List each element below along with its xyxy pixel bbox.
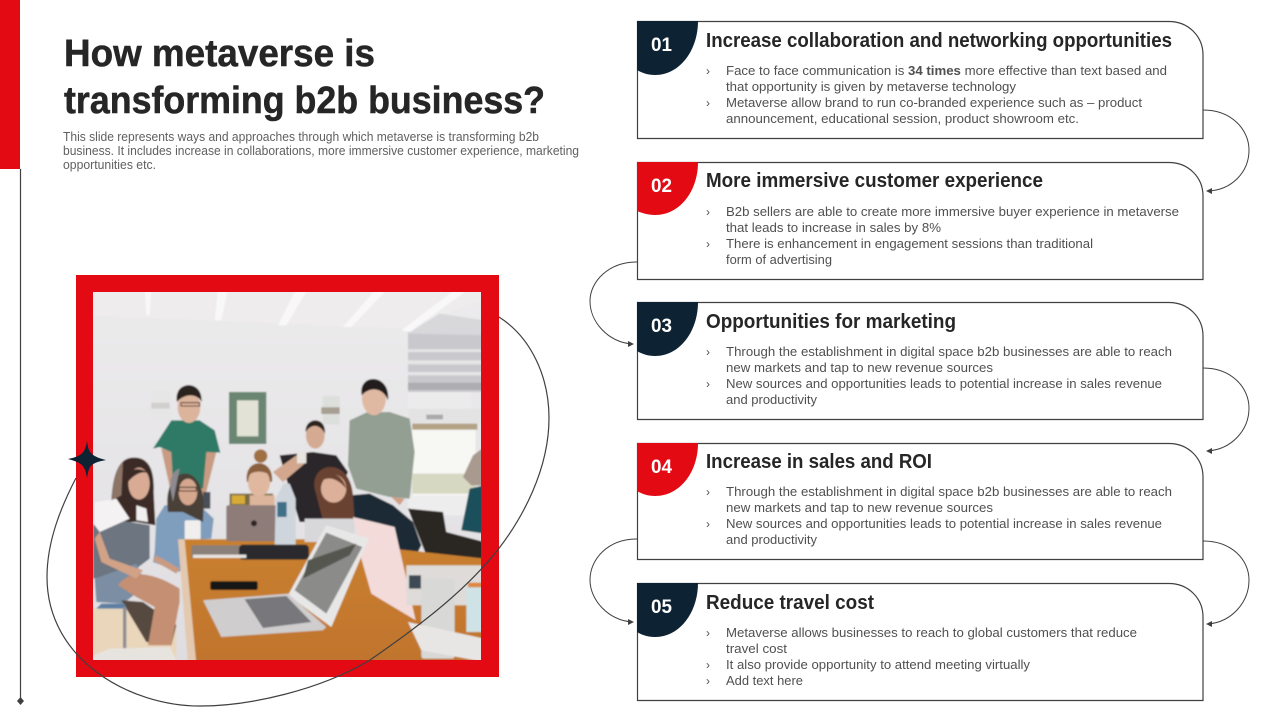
bullets 03: Through the establishment in digital space b2b businesses are able to reach [726, 344, 1172, 359]
bullets 03: › [706, 345, 710, 359]
connector arrow: card 1 to card 2 [1203, 110, 1249, 194]
icon: four-point star [68, 441, 106, 478]
bullets 03 [706, 344, 1172, 407]
bullets 03: › [706, 377, 710, 391]
person: woman in black top [273, 420, 348, 522]
subtitle text block: opportunities etc. [63, 158, 156, 172]
bullets 05 [706, 625, 1137, 688]
connector arrow: card 4 to card 5 [590, 539, 637, 625]
grey laptop with apple logo [226, 505, 276, 541]
panel: card 02 immersive experience [637, 162, 1203, 280]
silver laptop in foreground [203, 525, 369, 637]
badge 05: 05 [651, 597, 672, 618]
subtitle text block [63, 130, 579, 172]
person: man in grey sweater [348, 379, 415, 505]
bullets 04: New sources and opportunities leads to potential increase in sales revenue [726, 516, 1162, 531]
badge 03: 03 [651, 316, 672, 337]
dark wooden chair [407, 508, 481, 560]
panel: card 04 sales and ROI [637, 443, 1203, 560]
person: woman leaning forward [314, 467, 421, 562]
bullets 02: › [706, 205, 710, 219]
person: girl with hair bun [230, 449, 275, 507]
bullets 02: B2b sellers are able to create more immersive buyer experience in metaverse [726, 204, 1179, 219]
bullets 03: new markets and tap to new revenue sources [726, 360, 994, 375]
panel: card 01 collaboration [637, 21, 1203, 138]
badge 04 [637, 443, 698, 496]
bullets 05: › [706, 674, 710, 688]
heading 02: More immersive customer experience [706, 170, 1043, 192]
bullets 05: Add text here [726, 673, 803, 688]
subtitle text block: business. It includes increase in collaborations, more immersive customer experience, marketing [63, 144, 579, 158]
bullets 01: › [706, 96, 710, 110]
badge 04: 04 [651, 457, 672, 478]
heading 01: Increase collaboration and networking opportunities [706, 30, 1172, 52]
panel: card 03 marketing [637, 302, 1203, 420]
bullets 04 [706, 484, 1172, 547]
glasses behind laptop [305, 519, 355, 542]
pink laptop [353, 517, 416, 620]
photo: team meeting around a table [90, 289, 484, 663]
room background [90, 289, 484, 663]
heading 05: Reduce travel cost [706, 592, 874, 614]
bullets 01 [706, 63, 1167, 126]
bullets 04: › [706, 485, 710, 499]
glassware and mug at right [406, 565, 484, 662]
badge 03 [637, 302, 698, 356]
bullets 04: Through the establishment in digital space b2b businesses are able to reach [726, 484, 1172, 499]
title [64, 33, 545, 122]
table [178, 539, 484, 663]
bullets 02 [706, 204, 1179, 267]
vertical rule with diamond end [17, 169, 24, 705]
red corner bar [0, 0, 20, 169]
water bottle [275, 484, 296, 547]
bullets 05: travel cost [726, 641, 787, 656]
decorative swoosh curve around photo [47, 317, 549, 706]
bullets 04: › [706, 517, 710, 531]
heading 04: Increase in sales and ROI [706, 451, 932, 473]
bullets 01: announcement, educational session, product showroom etc. [726, 111, 1079, 126]
bullets 03: New sources and opportunities leads to potential increase in sales revenue [726, 376, 1162, 391]
title: transforming b2b business? [64, 80, 545, 122]
badge 01: 01 [651, 35, 672, 56]
bullets 05: Metaverse allows businesses to reach to global customers that reduce [726, 625, 1137, 640]
bullets 05: › [706, 626, 710, 640]
bullets 04: and productivity [726, 532, 817, 547]
person at right edge [460, 448, 481, 534]
bullets 02: that leads to increase in sales by 8% [726, 220, 941, 235]
badge 02 [637, 162, 698, 215]
person: man in green t-shirt [153, 385, 220, 509]
badge 05 [637, 583, 698, 637]
bullets 02: form of advertising [726, 252, 832, 267]
person: woman in denim shirt [153, 469, 214, 574]
cables, papers and dark case on table [191, 545, 309, 590]
chair cushion at bottom left [93, 646, 176, 660]
wall art and sconces [151, 390, 340, 444]
bullets 04: new markets and tap to new revenue sources [726, 500, 994, 515]
bullets 05: It also provide opportunity to attend meeting virtually [726, 657, 1030, 672]
red photo frame [76, 275, 499, 677]
bullets 02: There is enhancement in engagement sessions than traditional [726, 236, 1093, 251]
connector arrow: card 4 to card 5 right side [1203, 541, 1249, 627]
bullets 01: Metaverse allow brand to run co-branded experience such as – product [726, 95, 1142, 110]
badge 01 [637, 21, 698, 75]
bullets 02: › [706, 237, 710, 251]
subtitle text block: This slide represents ways and approaches through which metaverse is transforming b2b [63, 130, 539, 144]
bullets 05: › [706, 658, 710, 672]
bullets 03: and productivity [726, 392, 817, 407]
connector arrow: card 2 to card 3 [590, 262, 637, 347]
panel: card 05 travel cost [637, 583, 1203, 700]
connector arrow: card 3 to card 4 [1203, 368, 1249, 454]
heading 03: Opportunities for marketing [706, 311, 956, 333]
badge 02: 02 [651, 176, 672, 197]
bullets 01: that opportunity is given by metaverse technology [726, 79, 1016, 94]
person: woman in striped dress seated [93, 458, 180, 650]
bullets 01: Face to face communication is 34 times more effective than text based and [726, 63, 1167, 78]
title: How metaverse is [64, 33, 375, 75]
bullets 01: › [706, 64, 710, 78]
